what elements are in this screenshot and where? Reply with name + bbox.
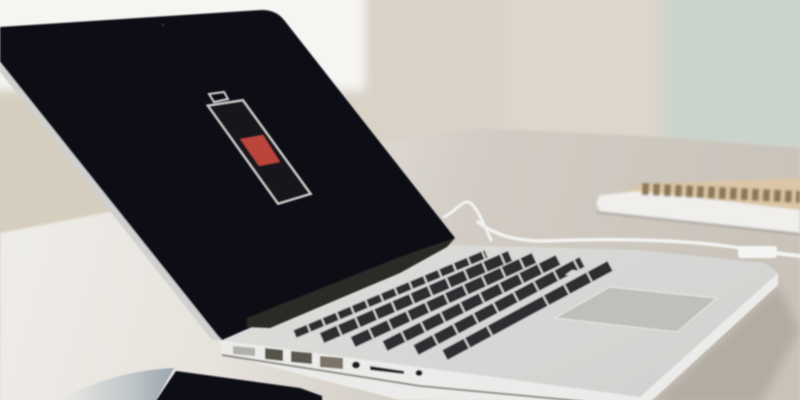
ports xyxy=(233,346,422,376)
battery terminal xyxy=(209,92,228,102)
desk surface xyxy=(0,128,800,400)
base front edge xyxy=(220,273,778,400)
black screen xyxy=(0,10,455,340)
phone reflection xyxy=(57,368,174,400)
background wall and window xyxy=(0,0,800,250)
battery icon xyxy=(208,92,311,204)
phone black surface xyxy=(155,371,322,400)
cable connector xyxy=(738,246,777,258)
camera dot xyxy=(162,24,164,26)
desk shadow beneath laptop xyxy=(650,285,800,400)
notebook xyxy=(596,178,800,234)
keyboard xyxy=(295,254,610,355)
phone on desk xyxy=(57,368,322,400)
battery outline xyxy=(208,100,311,204)
red battery level xyxy=(240,135,280,166)
laptop screen lid xyxy=(0,10,455,340)
trackpad xyxy=(555,287,717,332)
notebook spiral binding xyxy=(642,189,800,197)
charging cable xyxy=(444,202,800,258)
laptop base xyxy=(220,245,778,400)
light key xyxy=(565,270,586,276)
hinge strip xyxy=(247,238,455,328)
lid silver edge xyxy=(0,62,222,340)
